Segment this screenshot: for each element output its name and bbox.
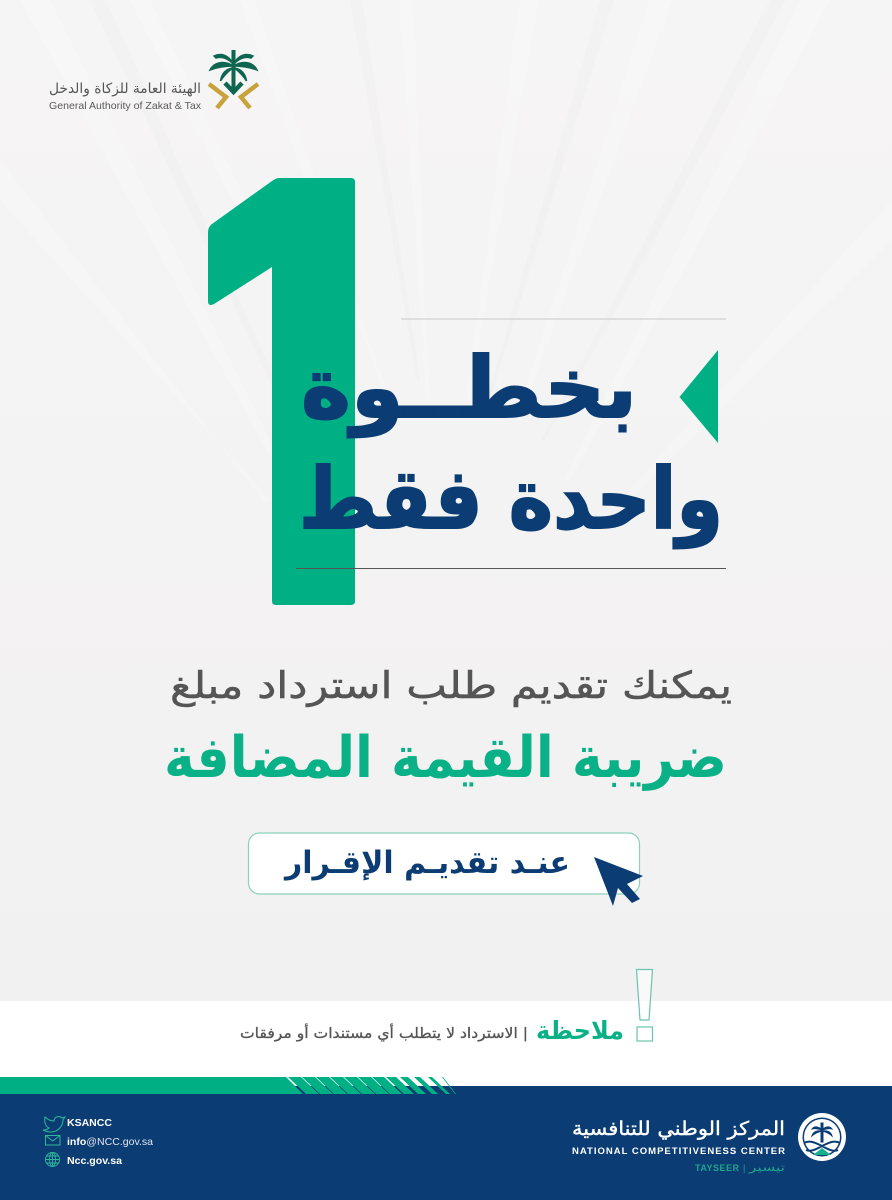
- Arabic center name: المركز الوطني للتنافسية: [572, 1118, 785, 1140]
- highlighted subtitle: ضريبة القيمة المضافة: [164, 725, 727, 791]
- Tayseer label: TAYSEER: [695, 1163, 740, 1173]
- note text: | الاسترداد لا يتطلب أي مستندات أو مرفقات: [240, 1023, 528, 1042]
- note heading: ملاحظة: [536, 1016, 624, 1045]
- subtitle: يمكنك تقديم طلب استرداد مبلغ: [170, 664, 732, 707]
- Tayseer Arabic: تيسير: [748, 1161, 785, 1174]
- icon: envelope: [46, 1136, 60, 1145]
- contact: website: Ncc.gov.sa: [67, 1155, 122, 1167]
- Tayseer separator: |: [743, 1163, 745, 1173]
- big numeral 1: [208, 178, 355, 605]
- icon: center emblem: [798, 1113, 846, 1161]
- contact: website: [46, 1152, 122, 1167]
- contact: twitter: KSANCC: [67, 1117, 112, 1129]
- icon: exclamation mark: [636, 970, 652, 1041]
- note band: [0, 970, 892, 1086]
- footer: [0, 1077, 892, 1200]
- Arabic name: الهيئة العامة للزكاة والدخل: [49, 81, 201, 97]
- button label: عنـد تقديـم الإقـرار: [283, 845, 570, 881]
- icon: bird: [43, 1117, 65, 1132]
- logo: National Competitiveness Center: [572, 1113, 846, 1174]
- English name: General Authority of Zakat & Tax: [49, 100, 202, 112]
- arrow triangle: [680, 350, 718, 443]
- icon: palm and crossed chevrons: [209, 50, 258, 108]
- contact: email: info@NCC.gov.sa: [67, 1136, 153, 1148]
- headline line 2: واحدة فقط: [299, 450, 723, 549]
- logo: General Authority of Zakat and Tax: [49, 50, 258, 112]
- divider top: [401, 318, 726, 320]
- divider bottom: [296, 568, 726, 569]
- English center name: NATIONAL COMPETITIVENESS CENTER: [572, 1146, 785, 1157]
- icon: cursor: [594, 857, 643, 906]
- contact: twitter: [43, 1117, 112, 1132]
- icon: globe: [46, 1152, 60, 1166]
- headline line 1: بخطــوة: [301, 339, 637, 438]
- green bar with slanted stripes: [0, 1077, 456, 1094]
- button: [248, 833, 643, 906]
